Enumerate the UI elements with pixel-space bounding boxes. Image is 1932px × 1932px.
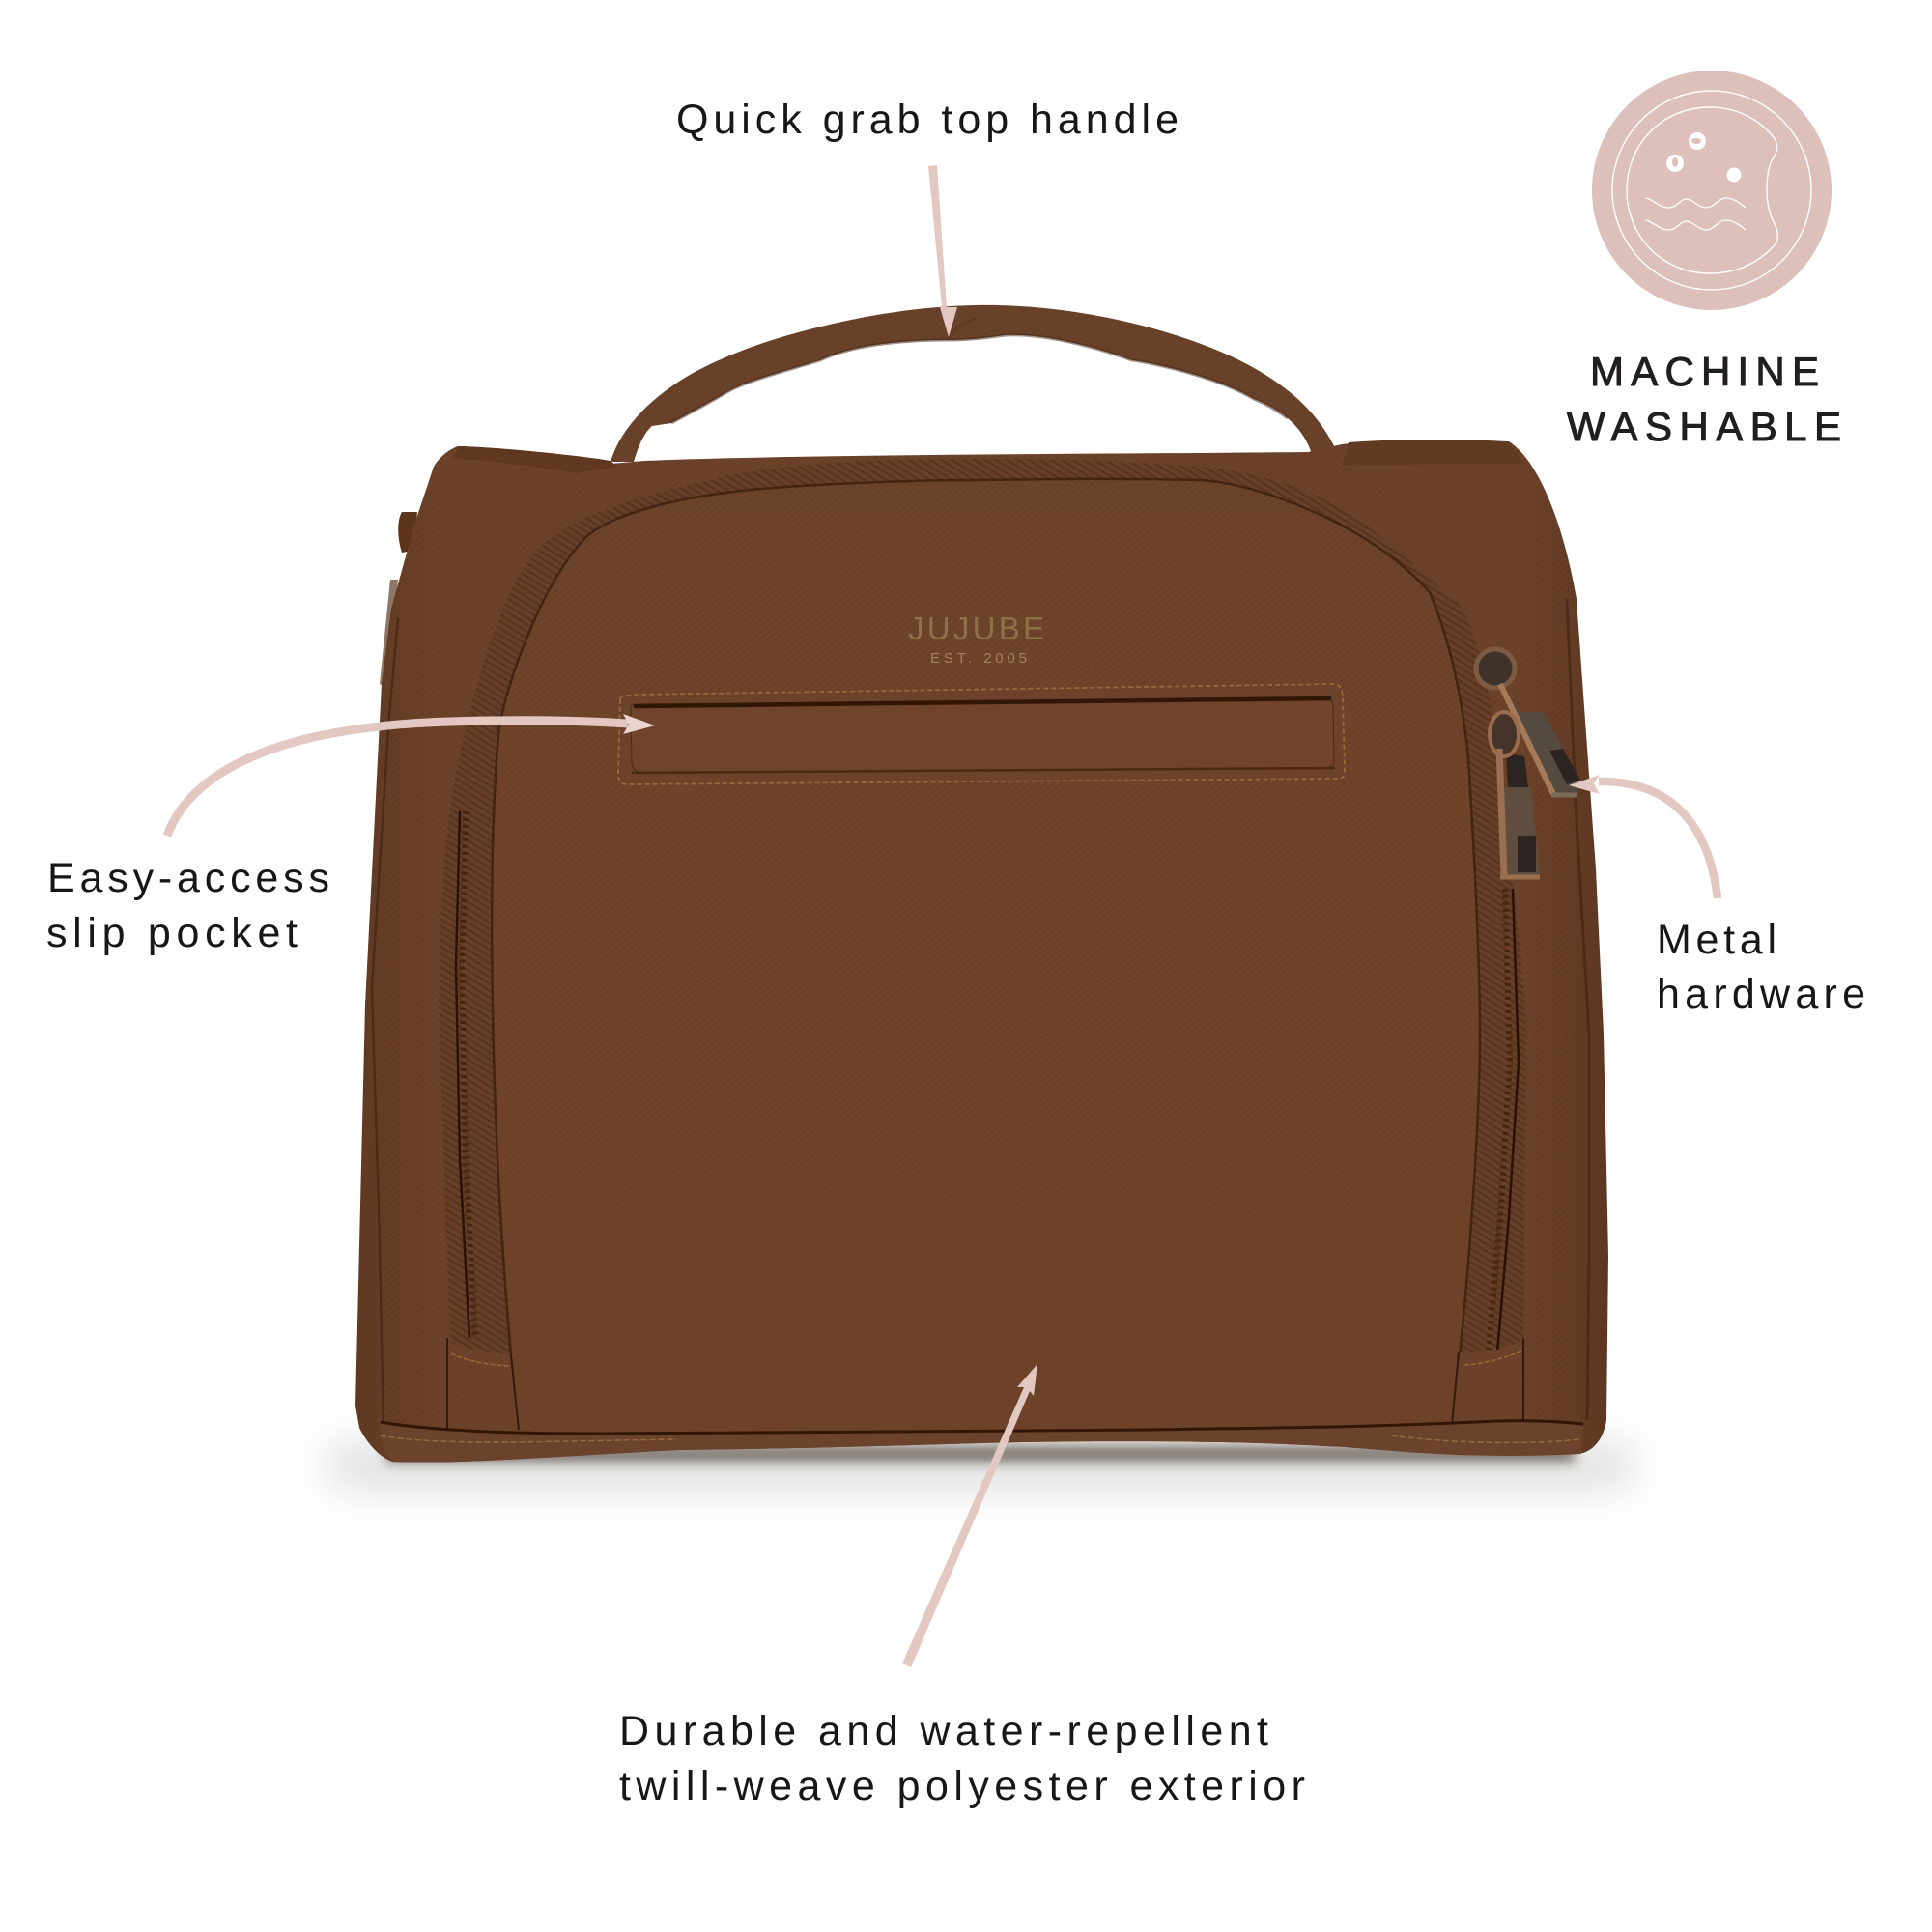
icon: machine washable badge [1592, 71, 1832, 310]
label: durable exterior: twill-weave polyester exterior [619, 1763, 1305, 1809]
label: easy-access slip pocket [46, 855, 329, 956]
label: durable exterior [619, 1708, 1305, 1809]
label: metal hardware [1657, 917, 1865, 1017]
left zipper teeth [456, 811, 469, 1338]
strap loop on left side [398, 512, 417, 553]
label: quick grab top handle: Quick grab top handle [676, 97, 1179, 143]
logo: JUJUBE EST. 2005: JUJUBE [908, 611, 1044, 646]
arrow: to top handle [928, 165, 957, 337]
bag product image [355, 305, 1608, 1463]
right zipper teeth [1497, 889, 1519, 1352]
zipper piping band [439, 459, 1526, 1355]
zipper end tab right [1452, 1338, 1523, 1425]
arrow: to metal hardware [1569, 775, 1718, 898]
heading: machine washable [1567, 349, 1841, 449]
heading: machine washable: MACHINE [1590, 349, 1819, 394]
bottom hem [381, 1421, 1583, 1463]
label: metal hardware: Metal [1657, 917, 1776, 963]
front panel [439, 459, 1526, 1432]
label: metal hardware: hardware [1657, 971, 1865, 1017]
heading: machine washable: WASHABLE [1567, 404, 1841, 449]
flap ridge left [454, 446, 617, 473]
side seam left [372, 618, 398, 1428]
arrow: to twill exterior [902, 1364, 1037, 1667]
bag body [355, 440, 1608, 1463]
light side edge on left [380, 580, 398, 688]
label: easy-access slip pocket: Easy-access [47, 855, 329, 901]
slip pocket [618, 684, 1345, 784]
ground shadow under bag [328, 1444, 1633, 1488]
label: easy-access slip pocket: slip pocket [46, 910, 298, 956]
piping inner shadow line [492, 479, 1480, 1355]
icon: metal zipper pulls [1476, 649, 1580, 877]
top handle [611, 305, 1338, 462]
side seam right [1567, 599, 1589, 1420]
label: durable exterior: Durable and water-repellent [619, 1708, 1268, 1754]
logo: JUJUBE EST. 2005 [908, 611, 1044, 667]
flap ridge right [1342, 440, 1524, 466]
arrow: to slip pocket [167, 714, 655, 836]
zipper end tab left [447, 1338, 519, 1430]
logo: JUJUBE EST. 2005: EST. 2005 [930, 650, 1027, 667]
